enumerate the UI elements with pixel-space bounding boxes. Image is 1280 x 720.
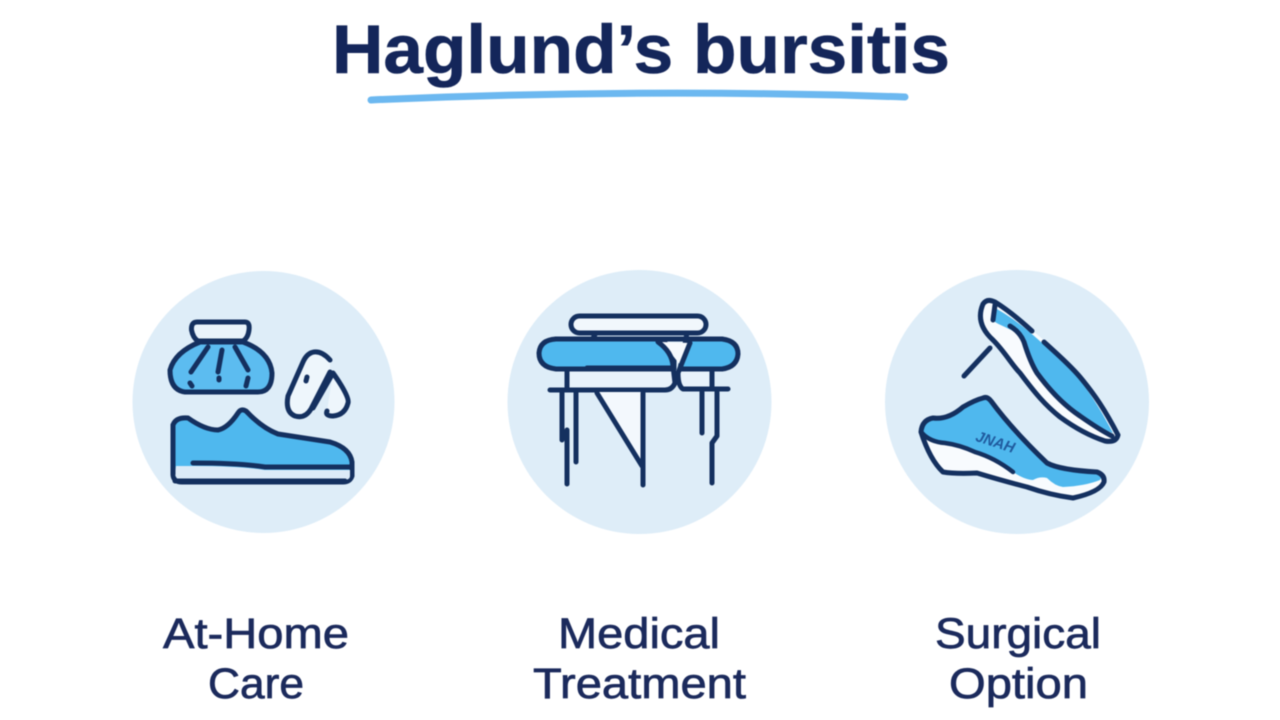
- icon: ice pack: [170, 322, 272, 392]
- title: Haglund’s bursitis: [332, 11, 950, 88]
- label: surgical option: [935, 610, 1101, 708]
- icon circle: surgical option: [885, 270, 1149, 534]
- title underline: [371, 93, 905, 100]
- icon circle: medical treatment: [508, 270, 772, 534]
- icon: shoe: [173, 410, 352, 482]
- panel: surgical option: [885, 270, 1149, 534]
- label: at-home care: Care: [208, 660, 304, 708]
- label: medical treatment: [533, 610, 746, 708]
- label: surgical option: Surgical: [935, 610, 1101, 658]
- label: at-home care: [163, 610, 349, 708]
- icon: massage table: [539, 316, 738, 485]
- icon: running shoe: [921, 397, 1104, 498]
- icon: insole: [964, 300, 1118, 441]
- label: surgical option: Option: [949, 660, 1088, 708]
- icon: capsule and drop: [287, 352, 348, 417]
- panel: at-home care: [132, 271, 394, 533]
- label: medical treatment: Treatment: [533, 660, 746, 708]
- icon circle: at-home care: [132, 271, 394, 533]
- shoe logo mark: JNAH: [974, 428, 1018, 457]
- panel: medical treatment: [508, 270, 772, 534]
- label: medical treatment: Medical: [558, 610, 720, 658]
- label: at-home care: At-Home: [163, 610, 349, 658]
